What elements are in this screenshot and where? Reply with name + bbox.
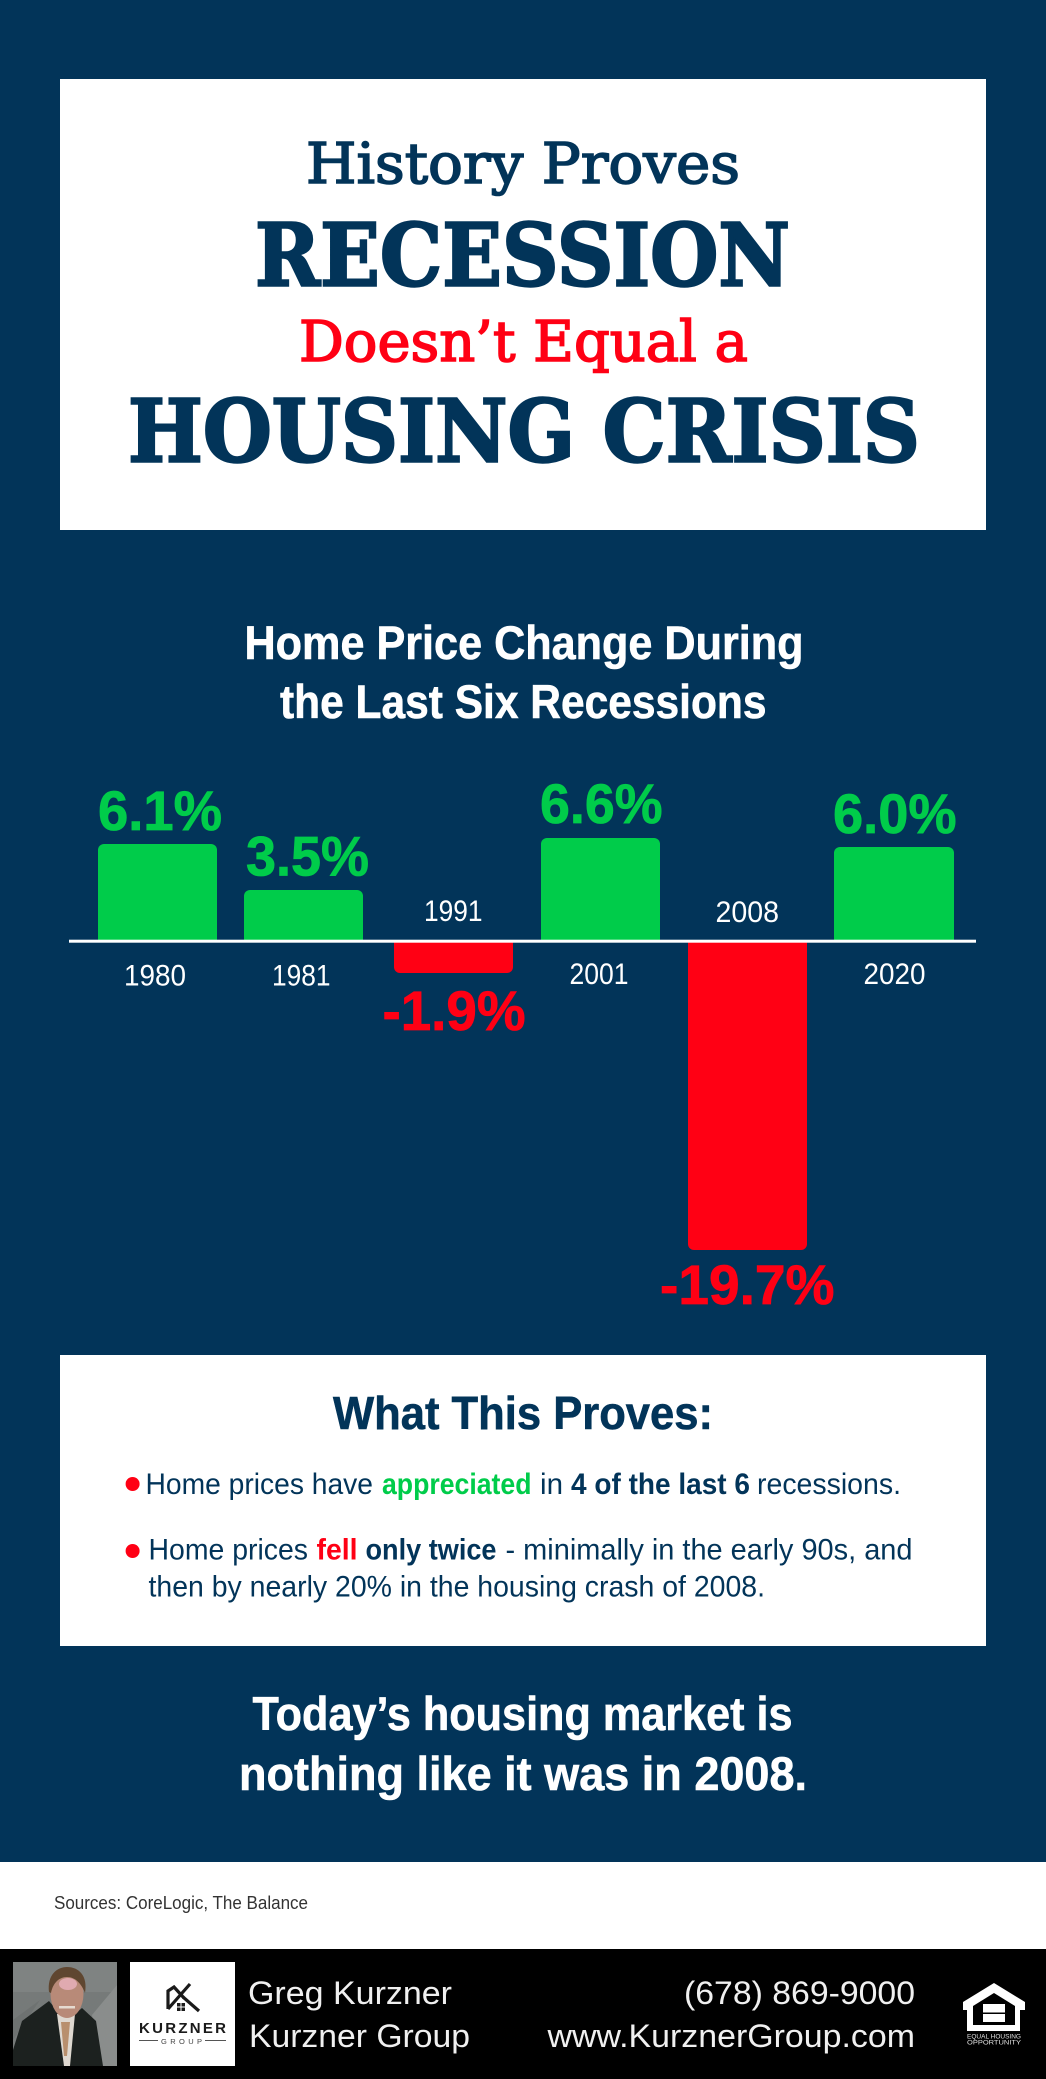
bar group: 2020 <box>833 782 956 991</box>
icon: equal housing opportunity: EQUAL HOUSING <box>967 2033 1021 2040</box>
bar group: 1991 <box>382 895 526 1042</box>
panel heading: What This Proves: <box>333 1387 713 1439</box>
bar group: 1980 <box>98 779 222 992</box>
bar group: 1980: 6.1% <box>98 779 222 842</box>
logo wordmark: KURZNER <box>139 2020 226 2037</box>
bar group: 1981 <box>244 824 369 992</box>
bar group: 1981: 1981 <box>272 960 330 992</box>
contact details <box>546 1975 915 2054</box>
heading line: HOUSING CRISIS: HOUSING CRISIS <box>128 382 920 482</box>
icon: equal housing opportunity: OPPORTUNITY <box>967 2040 1022 2046</box>
bar group: 2020: 6.0% <box>833 782 956 845</box>
bar chart: home price change <box>69 772 976 1316</box>
bar group: 2001: 6.6% <box>540 772 662 835</box>
heading line: RECESSION: RECESSION <box>255 206 790 306</box>
bar group: 1981: 3.5% <box>246 824 369 888</box>
bar group: 2008: 2008 <box>716 896 779 929</box>
bullet point two: only twice <box>366 1534 496 1566</box>
chart axis line <box>69 940 976 943</box>
bar group: 2008 <box>660 896 834 1316</box>
heading line: History Proves: History Proves <box>306 132 740 197</box>
closing statement: Today’s housing market is <box>252 1687 792 1740</box>
icon: house and K mark <box>168 1984 199 2011</box>
bullet point one: appreciated <box>382 1468 532 1501</box>
bullet point two: fell <box>316 1534 358 1566</box>
bullet point one: in <box>540 1468 563 1501</box>
bullet point one: recessions. <box>757 1468 901 1501</box>
bar group: 1991: 1991 <box>424 895 482 928</box>
heading line: Doesn't Equal a: Doesn’t Equal a <box>299 310 748 375</box>
sources strip <box>0 1862 1046 1949</box>
bullet point one: Home prices have <box>146 1468 373 1501</box>
sources strip: Sources: CoreLogic, The Balance <box>54 1892 308 1913</box>
bullet point one: 4 of the last 6 <box>571 1468 750 1501</box>
bar group: 1980: 1980 <box>124 960 186 992</box>
bar group: 2020: 2020 <box>864 958 926 991</box>
agent name: Kurzner Group <box>249 2018 470 2054</box>
agent name: Greg Kurzner <box>248 1975 452 2011</box>
icon: equal housing opportunity <box>963 1983 1025 2046</box>
chart heading <box>244 616 804 728</box>
panel: what this proves <box>60 1355 986 1646</box>
bar group: 2008: -19.7% <box>660 1253 834 1316</box>
kurzner group logo: GROUP <box>161 2037 202 2046</box>
bar group: 2001 <box>540 772 662 991</box>
bullet point two: Home prices <box>148 1534 308 1566</box>
agent photo <box>13 1962 117 2066</box>
contact details: (678) 869-9000 <box>684 1975 915 2011</box>
agent name <box>248 1975 470 2054</box>
closing statement: nothing like it was in 2008. <box>239 1747 807 1800</box>
footer bar <box>0 1949 1046 2079</box>
bullet point one <box>126 1468 901 1501</box>
contact details: www.KurznerGroup.com <box>546 2018 915 2054</box>
bullet point two: - minimally in the early 90s, and <box>506 1534 912 1566</box>
kurzner group logo <box>130 1962 235 2066</box>
bullet point two <box>126 1534 913 1604</box>
chart heading: the Last Six Recessions <box>280 675 766 728</box>
bullet point two: then by nearly 20% in the housing crash of 2008. <box>148 1570 765 1604</box>
bar group: 2001: 2001 <box>570 958 628 991</box>
chart heading: Home Price Change During <box>244 616 804 669</box>
closing statement <box>239 1687 807 1800</box>
bar group: 1991: -1.9% <box>382 979 526 1042</box>
panel: title <box>60 79 986 530</box>
